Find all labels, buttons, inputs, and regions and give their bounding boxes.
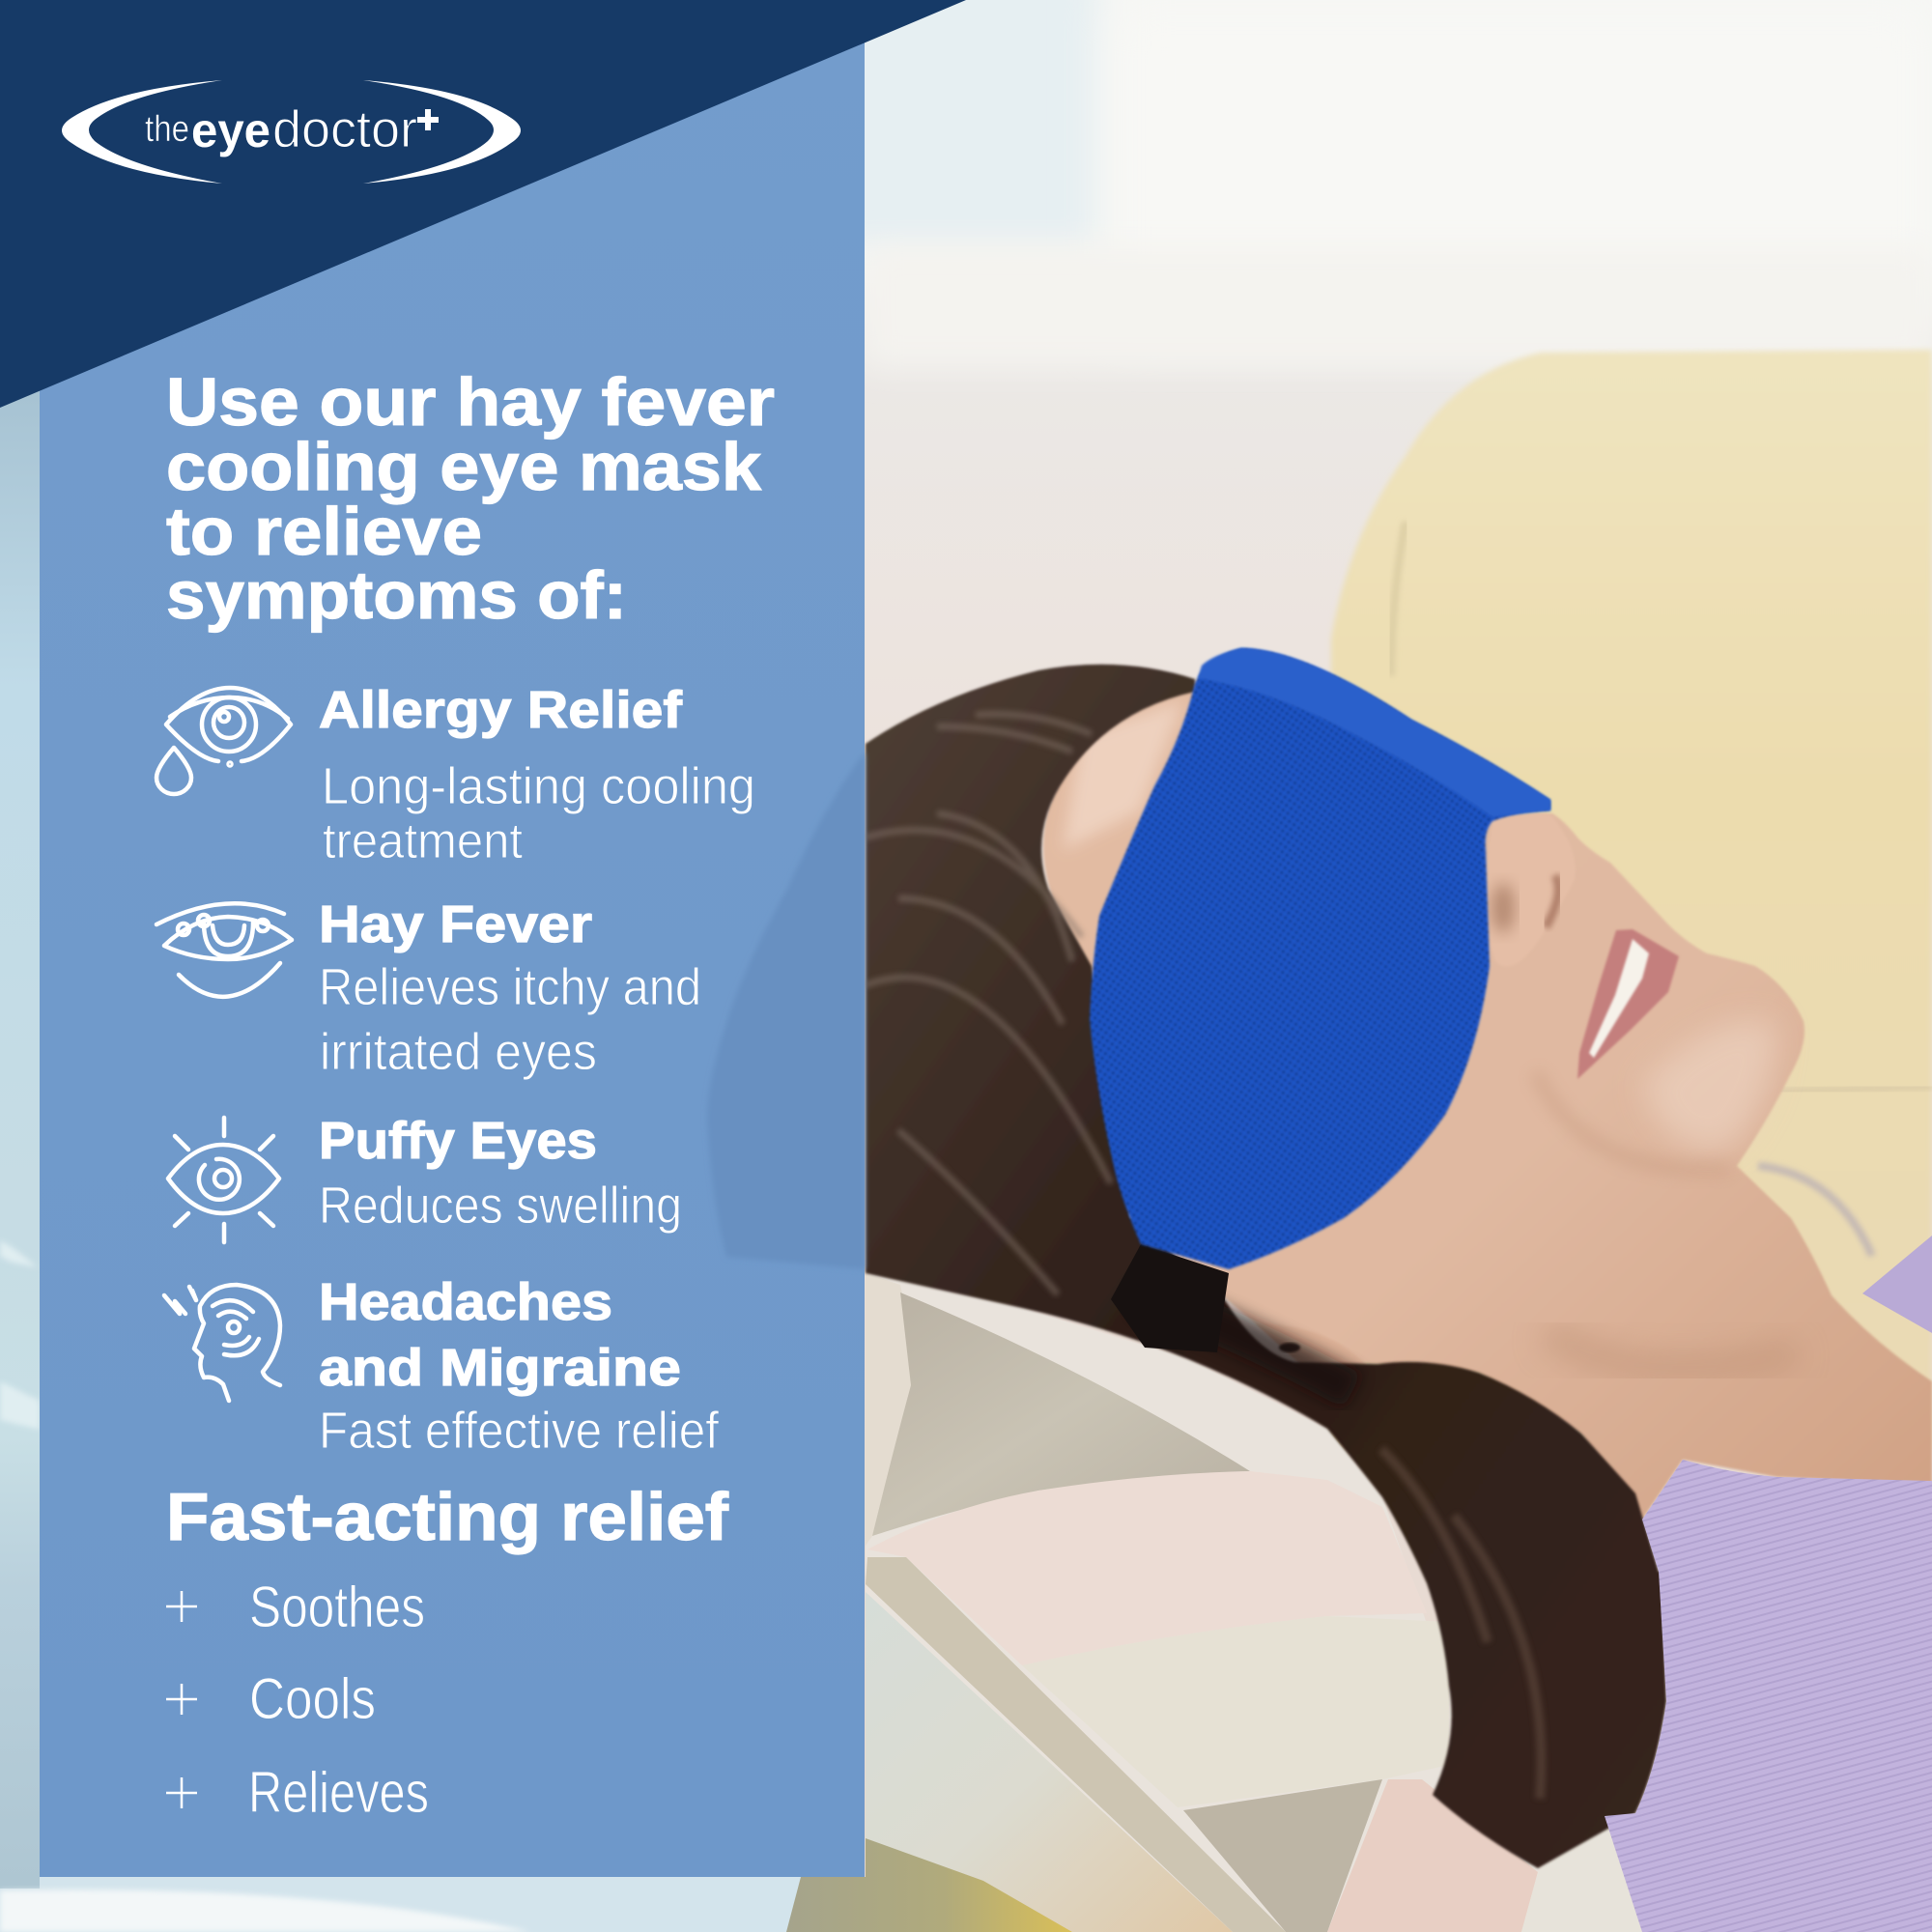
allergy relief text: Allergy Relief	[319, 681, 683, 739]
pillow	[786, 1273, 1642, 1932]
hay fever text: Hay Fever	[319, 895, 592, 953]
benefit list: Soothes	[249, 1575, 425, 1639]
benefit list: Relieves	[248, 1760, 429, 1825]
heading	[166, 364, 775, 633]
bottom strip of background	[0, 1877, 869, 1932]
allergy relief text: Long-lasting cooling	[322, 757, 755, 815]
mask strap	[1111, 1244, 1229, 1352]
headaches and migraine text: Fast effective relief	[319, 1402, 720, 1460]
navy diagonal banner	[0, 0, 966, 408]
headaches and migraine text	[319, 1273, 720, 1460]
heading: symptoms of:	[166, 557, 627, 633]
smiling mouth	[1577, 929, 1679, 1079]
headaches and migraine text: Headaches	[319, 1273, 612, 1331]
hay fever text: Relieves itchy and	[319, 958, 701, 1016]
headaches and migraine text: and Migraine	[319, 1339, 681, 1397]
icon: itchy eye	[156, 903, 292, 997]
heading: cooling eye mask	[166, 429, 761, 504]
logo: the eye doctor: doctor	[272, 100, 417, 158]
hair	[866, 665, 1719, 1868]
hay fever text	[319, 895, 701, 1081]
heading: Use our hay fever	[166, 364, 775, 440]
logo: the eye doctor	[62, 80, 521, 184]
logo: the eye doctor: the	[145, 109, 189, 150]
nose	[1485, 813, 1576, 966]
blue cooling eye mask	[1090, 648, 1550, 1269]
fast-acting relief heading: Fast-acting relief	[166, 1479, 729, 1554]
hay fever text: irritated eyes	[320, 1023, 597, 1081]
ear	[1256, 1323, 1366, 1368]
face and neck	[1043, 681, 1932, 1520]
sofa cushion	[1331, 350, 1932, 1449]
blue text panel	[40, 0, 865, 1877]
sweater	[1605, 1236, 1932, 1932]
allergy relief text	[319, 681, 755, 869]
puffy eyes text: Reduces swelling	[319, 1177, 682, 1235]
left strip of background	[0, 386, 40, 1889]
heading: to relieve	[166, 494, 482, 569]
icon: watering eye	[156, 688, 291, 794]
icon: puffy eye	[168, 1118, 279, 1242]
icon: headache head	[164, 1285, 280, 1401]
allergy relief text: treatment	[323, 813, 524, 869]
benefit list	[166, 1575, 429, 1825]
puffy eyes text	[319, 1112, 682, 1235]
logo: the eye doctor: eye	[191, 103, 270, 157]
benefit list: Cools	[249, 1666, 376, 1731]
puffy eyes text: Puffy Eyes	[319, 1112, 597, 1170]
